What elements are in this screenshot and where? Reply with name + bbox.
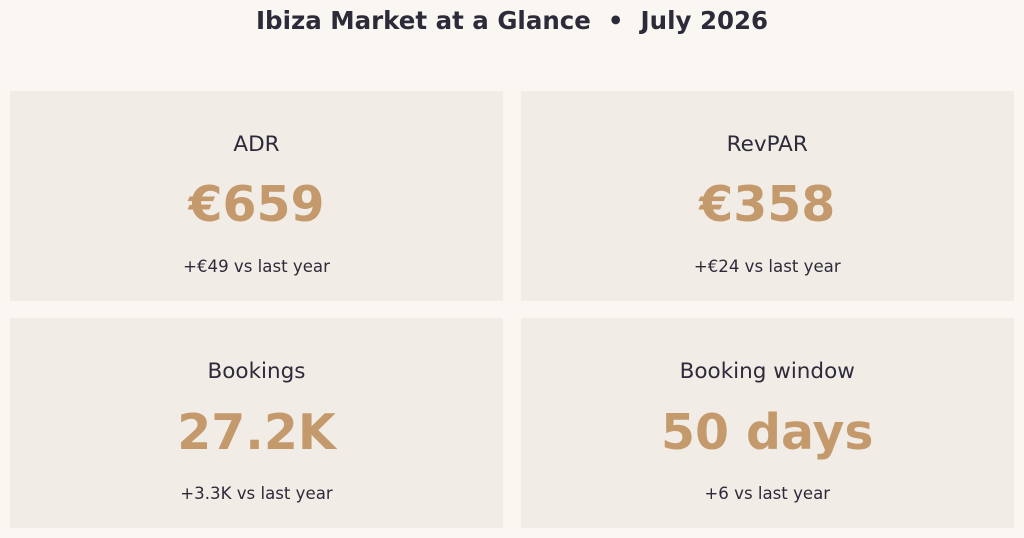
change: ADR: +€49 vs last year [183,257,330,276]
title: Ibiza Market at a Glance • July 2026 [256,6,768,35]
panel: RevPAR [521,91,1014,301]
change: Bookings: +3.3K vs last year [180,484,333,503]
change: Booking window: +6 vs last year [704,484,830,503]
label: RevPAR: RevPAR [727,132,808,157]
label: Bookings: Bookings [208,359,305,384]
value: Bookings: 27.2K [177,404,336,461]
change: RevPAR: +€24 vs last year [694,257,841,276]
value: RevPAR: €358 [699,176,835,233]
value: ADR: €659 [188,176,325,233]
label: ADR: ADR [233,132,280,157]
panel: Booking window [521,318,1014,528]
panel: Bookings [10,318,503,528]
panel: ADR [10,91,503,301]
label: Booking window: Booking window [680,359,855,384]
value: Booking window: 50 days [661,404,874,461]
